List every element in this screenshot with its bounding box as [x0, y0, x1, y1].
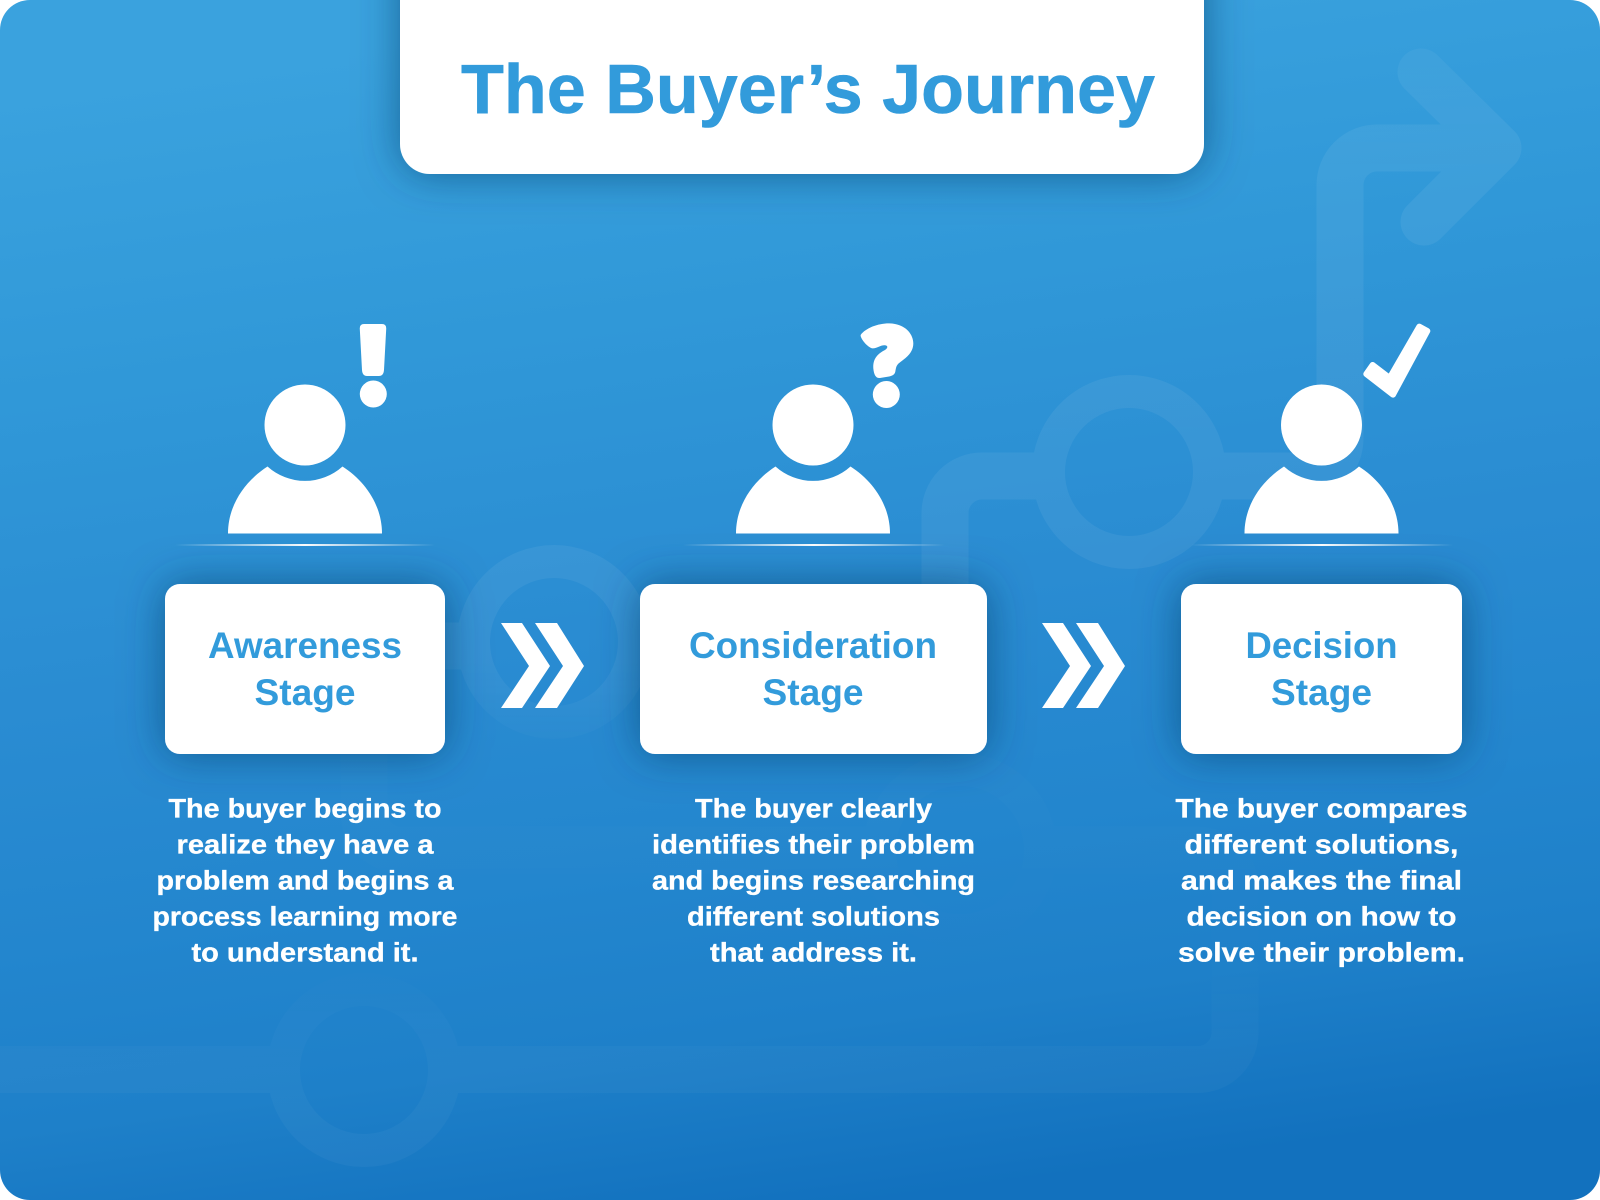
description: consideration: identifies their problem — [652, 830, 975, 860]
card: awareness stage — [165, 584, 445, 754]
description: awareness: to understand it. — [192, 938, 418, 968]
background route arrow pattern — [445, 48, 1522, 695]
description: decision: decision on how to — [1186, 902, 1456, 932]
title: The Buyer’s Journey — [461, 50, 1155, 128]
card: decision stage: Stage — [1271, 672, 1372, 713]
card: decision stage — [1181, 584, 1462, 754]
panel: consideration stage — [640, 323, 987, 968]
description: awareness: The buyer begins to — [168, 794, 442, 824]
description: consideration: that address it. — [710, 938, 917, 968]
card: decision stage: Decision — [1246, 625, 1398, 666]
panel: awareness stage — [152, 324, 458, 968]
card: consideration stage — [640, 584, 987, 754]
icon: person with question mark — [736, 323, 913, 534]
title banner — [400, 0, 1204, 174]
arrow: double chevron to decision — [1042, 623, 1125, 708]
arrow: double chevron to consideration — [501, 623, 584, 708]
description: decision: solve their problem. — [1178, 938, 1465, 968]
panel: decision stage — [1176, 327, 1468, 968]
card: awareness stage: Awareness — [208, 625, 402, 666]
description: consideration: The buyer clearly — [695, 794, 932, 824]
card: awareness stage: Stage — [254, 672, 356, 713]
description: decision: and makes the final — [1181, 866, 1462, 896]
description: awareness: problem and begins a — [156, 866, 455, 896]
description: decision — [1176, 794, 1468, 968]
description: consideration — [652, 794, 975, 968]
divider — [175, 544, 435, 546]
description: consideration: and begins researching — [652, 866, 975, 896]
description: decision: The buyer compares — [1176, 794, 1468, 824]
card: consideration stage: Stage — [762, 672, 864, 713]
divider — [683, 544, 945, 546]
description: awareness — [152, 794, 458, 968]
divider — [1191, 544, 1453, 546]
description: awareness: realize they have a — [176, 830, 435, 860]
icon: person with check mark — [1244, 327, 1427, 534]
description: awareness: process learning more — [152, 902, 458, 932]
card: consideration stage: Consideration — [689, 625, 937, 666]
icon: person with exclamation mark — [228, 324, 387, 534]
description: decision: different solutions, — [1184, 830, 1458, 860]
description: consideration: different solutions — [687, 902, 940, 932]
